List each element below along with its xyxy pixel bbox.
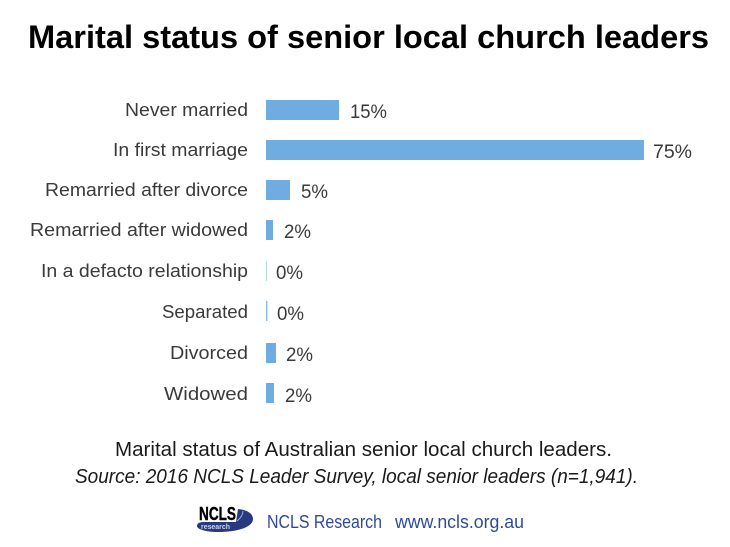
footer: website: www.ncls.org.au [394, 512, 524, 532]
icon: NCLS logo: research [201, 524, 230, 531]
caption: Marital status of Australian senior local church leaders. [115, 439, 612, 461]
row: never married: 15% [350, 102, 387, 123]
row: widowed [164, 383, 312, 407]
row: separated [162, 301, 304, 325]
row: separated: Separated [162, 302, 248, 322]
footer: organisation name: NCLS Research [267, 512, 382, 532]
row: remarried after divorce: 5% [301, 182, 328, 203]
title: Marital status of senior local church leaders [28, 19, 709, 55]
row: in a defacto relationship [41, 261, 303, 284]
icon: NCLS logo: NCLS [199, 504, 236, 524]
row: in a defacto relationship: 0% [276, 263, 303, 284]
row: in first marriage [113, 140, 692, 163]
row: remarried after widowed: 2% [284, 222, 311, 243]
row: remarried after divorce [45, 180, 328, 203]
row: remarried after widowed: Remarried after widowed [30, 220, 248, 240]
row: divorced: 2% [286, 345, 313, 366]
row: in first marriage: 75% [653, 142, 692, 163]
row: widowed: Widowed [164, 384, 248, 404]
row: divorced [170, 343, 313, 366]
row: separated: 0% [277, 304, 304, 325]
row: in a defacto relationship: In a defacto relationship [41, 261, 248, 281]
row: in first marriage: In first marriage [113, 140, 248, 160]
row: never married: Never married [125, 100, 248, 120]
row: remarried after divorce: Remarried after divorce [45, 180, 248, 200]
bar chart [30, 100, 692, 407]
row: widowed: 2% [285, 386, 312, 407]
icon: NCLS logo [197, 504, 253, 532]
row: divorced: Divorced [170, 343, 248, 363]
row: never married [125, 100, 387, 123]
row: remarried after widowed [30, 220, 311, 243]
source note: Source: 2016 NCLS Leader Survey, local senior leaders (n=1,941). [75, 466, 638, 488]
